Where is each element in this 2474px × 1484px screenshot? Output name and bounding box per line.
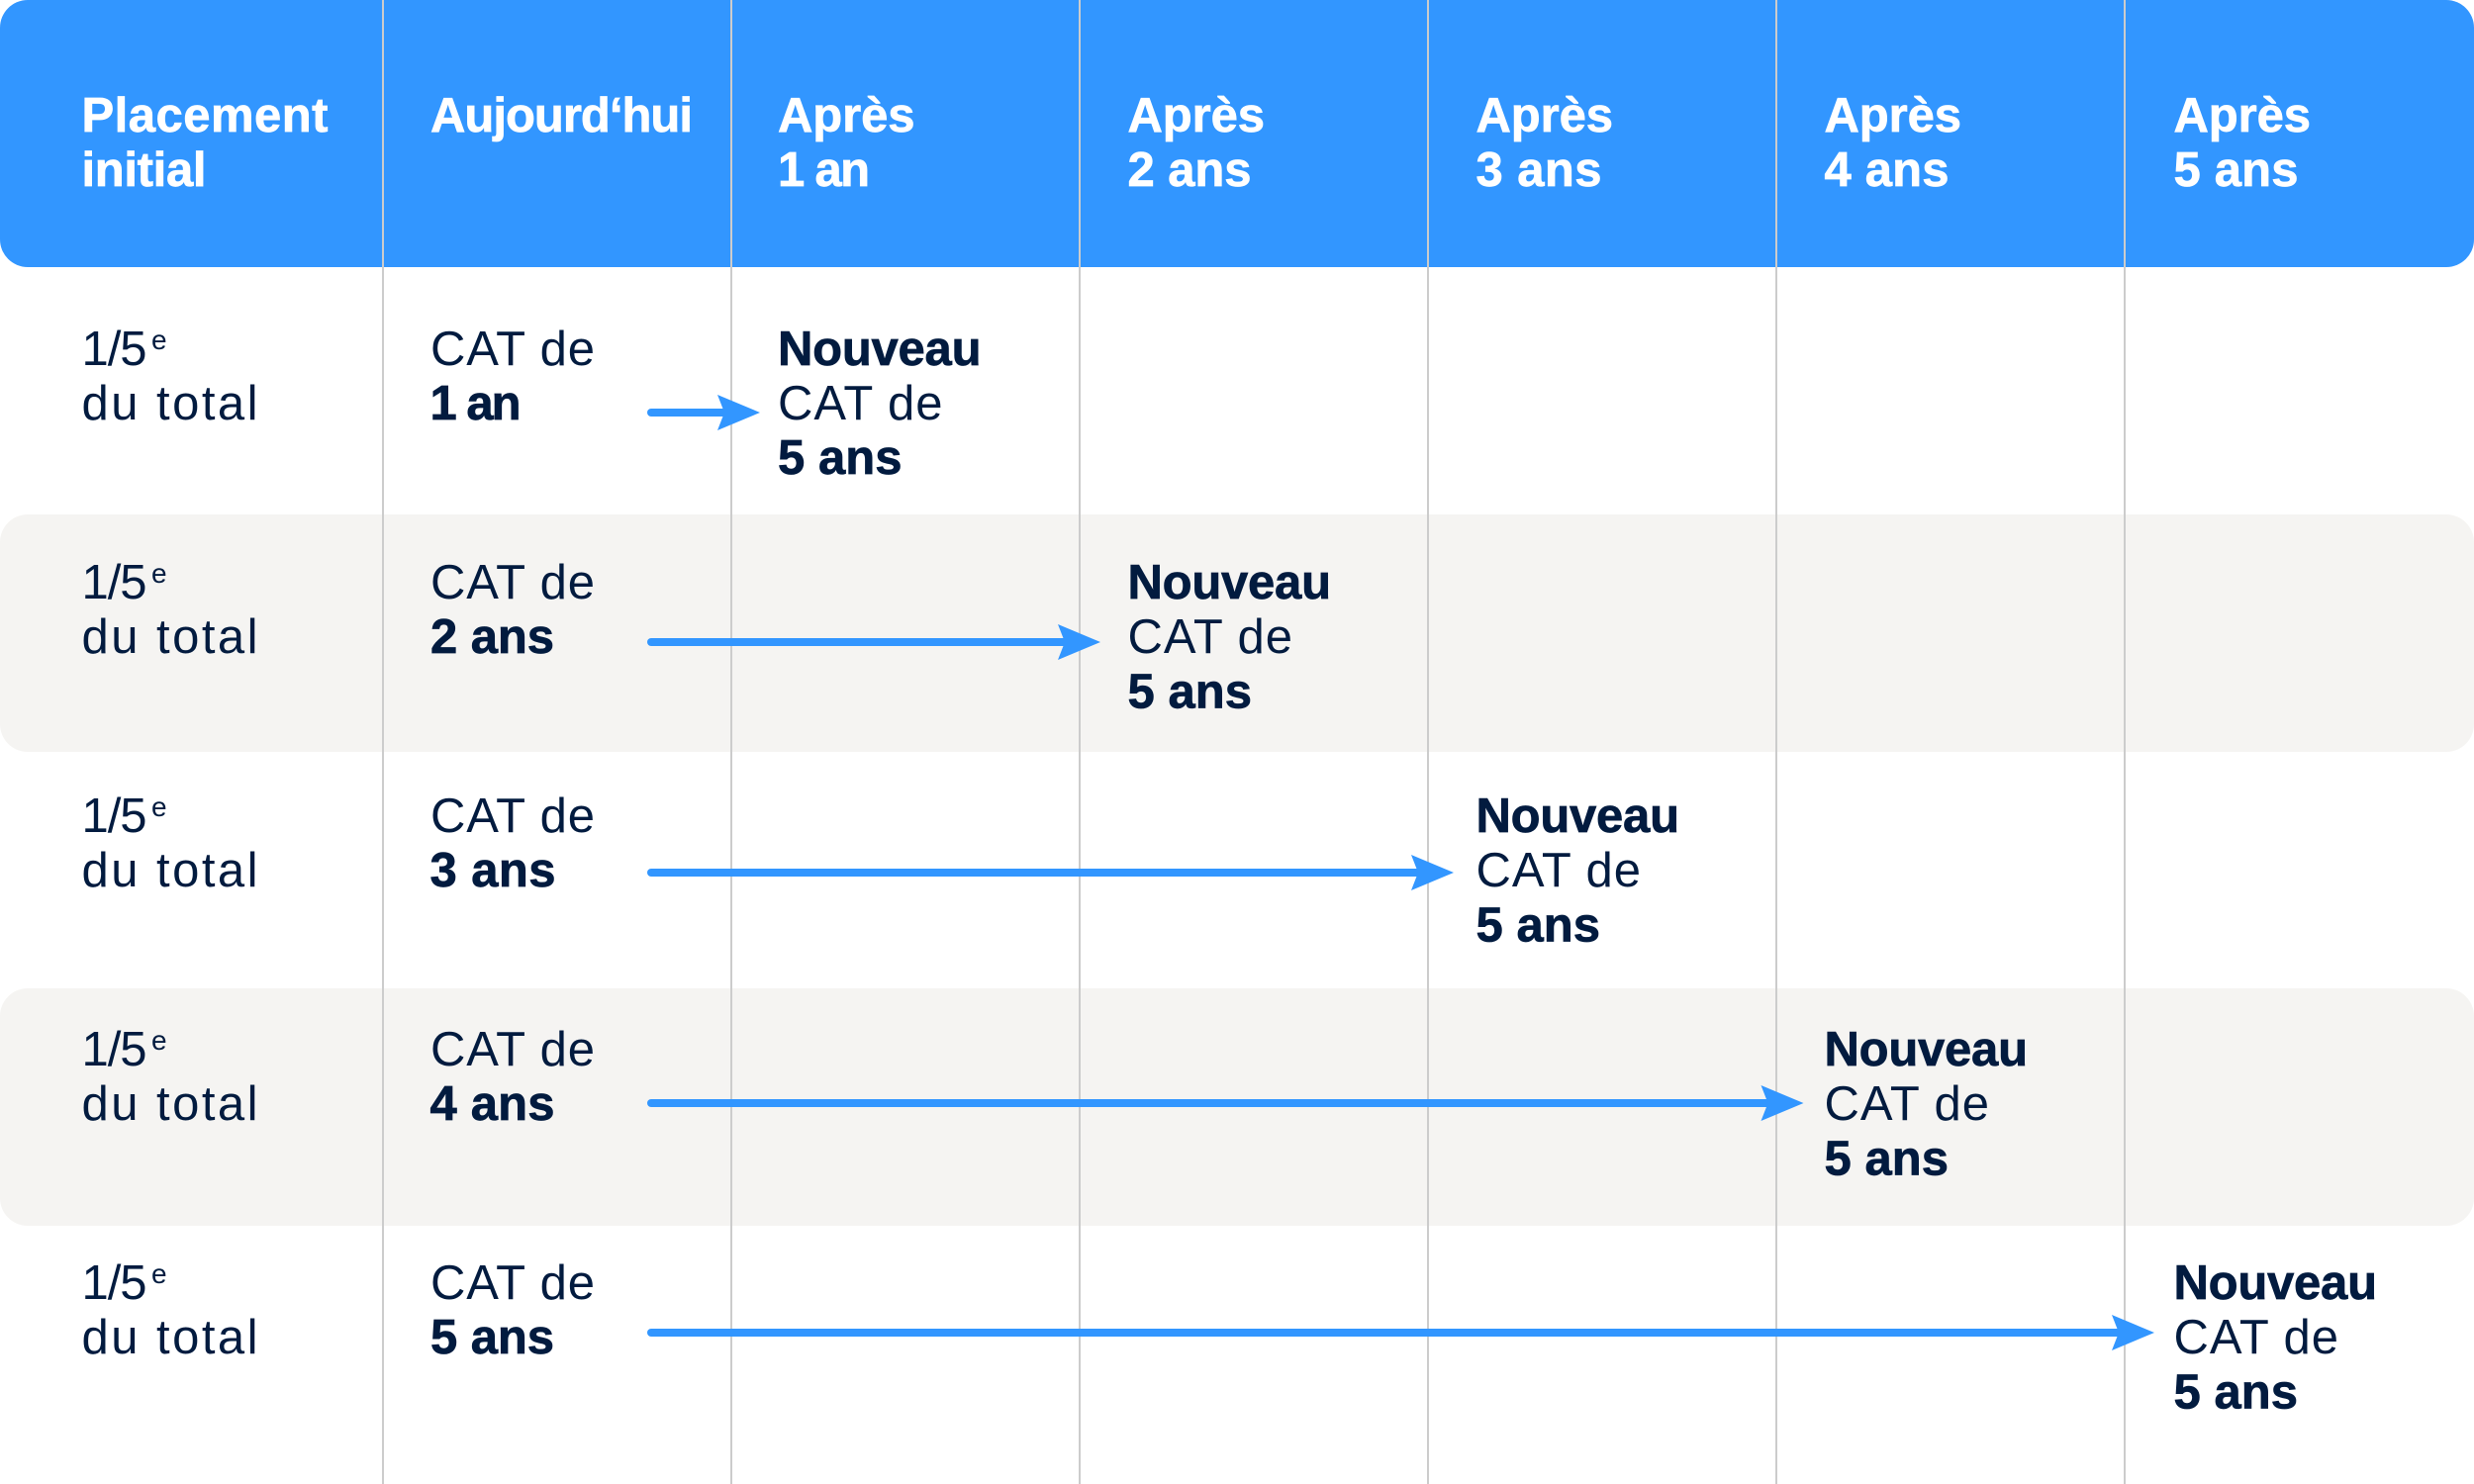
row 1 — [81, 323, 982, 485]
row 4 background — [0, 988, 2474, 1226]
arrow — [651, 1085, 1803, 1121]
heading: Aujourd'hui: Aujourd‘hui — [430, 89, 693, 142]
new term — [778, 323, 982, 485]
current term — [430, 556, 595, 664]
share of total: e — [151, 1025, 167, 1056]
share of total: e — [151, 325, 167, 355]
new term: 5 ans — [1128, 665, 1252, 718]
new term: Nouveau — [2173, 1256, 2377, 1310]
heading: Après 4 ans: Après — [1825, 89, 1961, 142]
row 2 — [81, 556, 1331, 718]
new term: CAT de — [2173, 1311, 2338, 1364]
share of total — [81, 323, 257, 430]
arrow — [651, 1315, 2154, 1350]
share of total — [81, 556, 257, 664]
current term — [429, 1023, 595, 1131]
heading: Après 4 ans — [1825, 89, 1961, 197]
heading: Après 4 ans: 4 ans — [1825, 143, 1950, 197]
share of total: du total — [81, 1311, 257, 1364]
new term: 5 ans — [1825, 1132, 1949, 1185]
share of total: 1/5 — [81, 1023, 146, 1076]
new term — [2173, 1256, 2377, 1419]
current term: CAT de — [430, 556, 595, 609]
heading: Après 2 ans: 2 ans — [1128, 143, 1251, 197]
share of total: du total — [81, 844, 257, 897]
share of total: 1/5 — [81, 556, 146, 609]
heading: Après 2 ans — [1128, 89, 1265, 197]
new term: Nouveau — [1128, 556, 1331, 609]
new term: CAT de — [1476, 844, 1641, 897]
current term: CAT de — [430, 1023, 595, 1076]
new term — [1128, 556, 1331, 718]
current term: CAT de — [430, 789, 595, 843]
row 3 — [81, 789, 1679, 952]
current term: 3 ans — [429, 844, 556, 897]
share of total: du total — [81, 610, 257, 664]
new term: 5 ans — [778, 431, 903, 485]
share of total: du total — [81, 377, 257, 430]
new term — [1825, 1023, 2028, 1185]
current term — [430, 1256, 595, 1364]
share of total: e — [151, 558, 167, 589]
new term: 5 ans — [1476, 898, 1600, 952]
heading: Après 1 an — [778, 89, 914, 197]
current term: CAT de — [430, 1256, 595, 1310]
new term: CAT de — [778, 377, 942, 430]
share of total: e — [151, 1258, 167, 1289]
arrow — [651, 624, 1100, 660]
share of total: e — [151, 791, 167, 822]
heading: Après 3 ans: Après — [1476, 89, 1613, 142]
row 2 background — [0, 514, 2474, 752]
share of total: 1/5 — [81, 789, 146, 843]
new term — [1476, 789, 1679, 952]
header band — [0, 0, 2474, 267]
new term: Nouveau — [778, 323, 982, 376]
heading: Après 1 an: Après — [778, 89, 914, 142]
heading: Après 3 ans — [1476, 89, 1613, 197]
heading: Après 5 ans: Après — [2173, 89, 2311, 142]
new term: Nouveau — [1476, 789, 1679, 843]
current term: 1 an — [429, 377, 521, 430]
share of total: 1/5 — [81, 1256, 146, 1310]
heading: Placement initial: Placement — [81, 89, 329, 142]
share of total — [81, 1023, 257, 1131]
current term — [429, 323, 595, 430]
new term: CAT de — [1128, 610, 1292, 664]
row 4 — [81, 1023, 2028, 1185]
share of total — [81, 789, 257, 897]
current term: 4 ans — [429, 1077, 554, 1131]
heading: Après 3 ans: 3 ans — [1476, 143, 1601, 197]
current term: 2 ans — [430, 610, 554, 664]
heading: Placement initial: initial — [81, 143, 206, 197]
heading: Après 1 an: 1 an — [778, 143, 870, 197]
current term: CAT de — [430, 323, 595, 376]
share of total — [81, 1256, 257, 1364]
arrow — [651, 395, 760, 430]
new term: CAT de — [1825, 1077, 1989, 1131]
new term: 5 ans — [2173, 1365, 2298, 1419]
heading: Après 5 ans: 5 ans — [2173, 143, 2298, 197]
heading: Après 5 ans — [2173, 89, 2311, 197]
share of total: 1/5 — [81, 323, 146, 376]
arrow — [651, 855, 1454, 890]
column headings — [81, 89, 2311, 197]
share of total: du total — [81, 1077, 257, 1131]
current term: 5 ans — [430, 1311, 554, 1364]
new term: Nouveau — [1825, 1023, 2028, 1076]
heading: Placement initial — [81, 89, 329, 197]
current term — [429, 789, 595, 897]
heading: Après 2 ans: Après — [1128, 89, 1265, 142]
row 5 — [81, 1256, 2377, 1419]
